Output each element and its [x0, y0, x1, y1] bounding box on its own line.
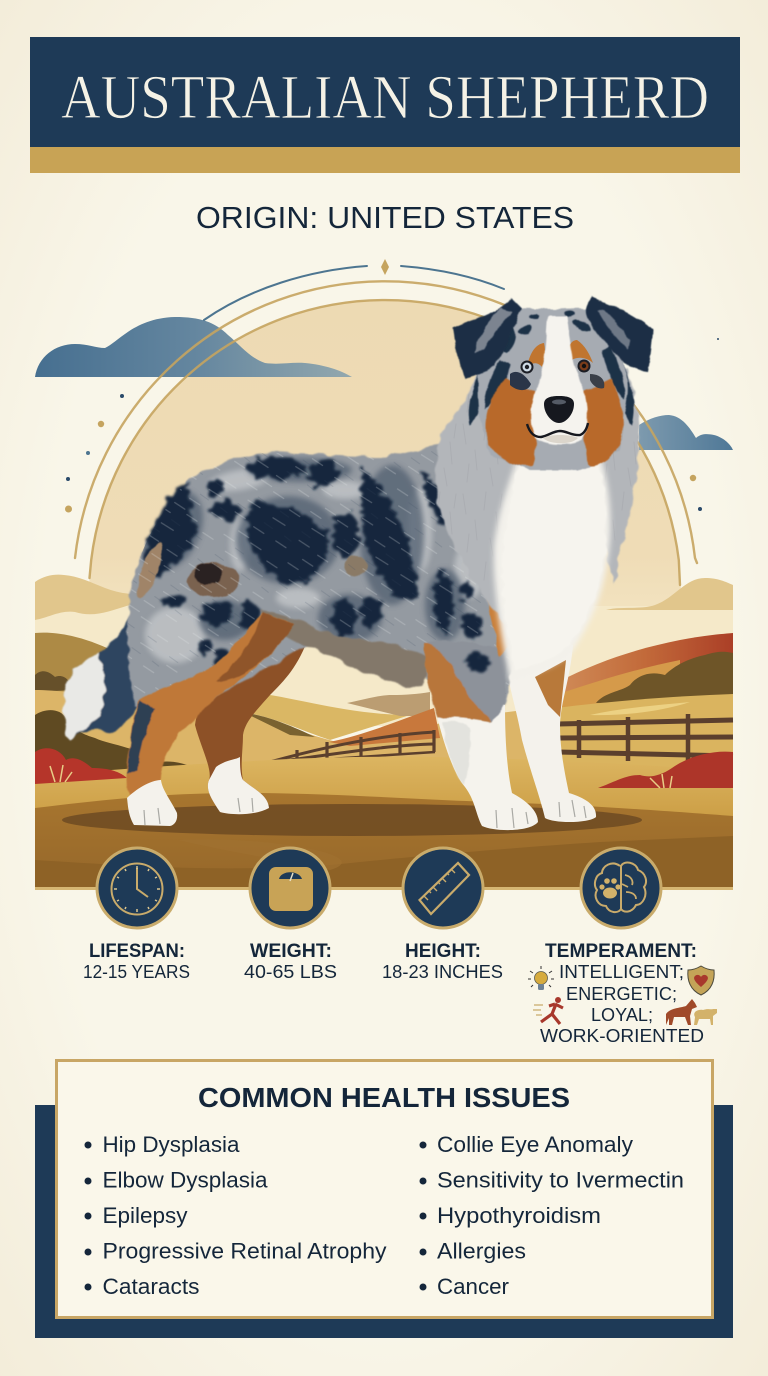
fur texture — [128, 445, 520, 705]
navy backing panel — [35, 1105, 733, 1338]
dark bush right — [596, 652, 733, 703]
health list right — [420, 1132, 684, 1299]
dark bush left — [35, 710, 197, 790]
belly fringe — [262, 610, 430, 687]
origin subtitle: ORIGIN: UNITED STATES — [196, 200, 574, 235]
red hills right — [556, 633, 733, 710]
sun disc — [89, 300, 681, 640]
sky band — [35, 606, 733, 726]
icon: runner — [533, 997, 563, 1024]
stat: lifespan — [83, 848, 190, 982]
ground — [35, 793, 733, 888]
landscape — [35, 575, 733, 890]
icon: dog — [666, 999, 697, 1025]
grass tufts — [50, 765, 672, 788]
foreground hill — [35, 757, 733, 830]
health list right: Sensitivity to Ivermectin — [437, 1168, 684, 1192]
right ear — [586, 297, 653, 372]
center hills — [240, 692, 410, 740]
red shrubs left — [35, 748, 127, 784]
icon: brain and paw — [581, 848, 661, 928]
dog — [64, 297, 653, 830]
mouth — [527, 423, 588, 437]
panel: common health issues — [56, 1060, 712, 1318]
health list right: Collie Eye Anomaly — [437, 1132, 633, 1157]
orange cheeks — [486, 378, 623, 466]
gold slope — [35, 690, 570, 790]
icon: scale — [250, 848, 330, 928]
temperament values: WORK-ORIENTED — [540, 1026, 704, 1046]
illustration scene — [35, 259, 733, 1338]
far hill right — [606, 578, 733, 610]
tail — [64, 610, 152, 740]
dark merle patches on skull — [484, 311, 625, 410]
orange shoulder stripe — [480, 568, 510, 657]
eye patches — [510, 372, 531, 390]
temperament values: INTELLIGENT; — [559, 962, 684, 982]
light fur patches — [145, 465, 486, 663]
merle spots — [147, 457, 482, 669]
health list right: Cancer — [437, 1274, 509, 1299]
dog shadow — [62, 804, 642, 836]
icon: shield with heart — [688, 966, 714, 995]
fence — [270, 714, 733, 765]
left eye — [520, 360, 534, 374]
health list left: Progressive Retinal Atrophy — [102, 1238, 386, 1264]
muzzle and blaze — [531, 316, 587, 445]
mid-tone mottling — [129, 458, 465, 642]
skull — [478, 308, 628, 470]
near front leg — [424, 641, 538, 830]
temperament label: TEMPERAMENT: — [545, 940, 697, 962]
panel base line — [35, 887, 733, 890]
health list right: Allergies — [437, 1238, 526, 1264]
health list right: Hypothyroidism — [437, 1203, 601, 1228]
health list left: Epilepsy — [102, 1203, 188, 1228]
icon: sheep — [694, 1009, 717, 1025]
neck ruff — [435, 370, 638, 625]
health list left — [84, 1132, 386, 1299]
stat: height — [382, 848, 503, 982]
height value: 18-23 INCHES — [382, 962, 503, 982]
stat: temperament — [528, 848, 717, 1046]
mid hill left — [35, 633, 135, 700]
nose — [544, 396, 574, 423]
weight value: 40-65 LBS — [244, 962, 337, 982]
scatter dots — [65, 338, 719, 512]
icon: lightbulb — [528, 966, 554, 990]
brown swirl — [132, 539, 368, 601]
near hind leg — [127, 612, 295, 826]
body — [128, 445, 520, 720]
health list left: Hip Dysplasia — [102, 1132, 240, 1157]
left ear — [453, 298, 522, 378]
icon: ruler — [403, 848, 483, 928]
decorative arcs — [75, 266, 697, 585]
lifespan value: 12-15 YEARS — [83, 962, 190, 982]
temperament values — [540, 962, 704, 1046]
gold hill right — [556, 694, 733, 790]
far front leg — [505, 640, 596, 822]
health list left: Cataracts — [102, 1274, 200, 1299]
diamond ornament — [381, 259, 389, 275]
cloud right — [639, 415, 733, 450]
temperament values: LOYAL; — [591, 1005, 653, 1025]
health heading: COMMON HEALTH ISSUES — [198, 1082, 570, 1113]
white chest — [494, 447, 610, 682]
far hind leg — [195, 630, 311, 814]
bushes left far — [35, 671, 72, 692]
weight label: WEIGHT: — [250, 940, 332, 962]
head — [453, 297, 653, 470]
height label: HEIGHT: — [405, 940, 481, 962]
header banner — [30, 37, 740, 173]
dark neck sides — [469, 360, 634, 425]
right eye — [578, 360, 590, 372]
icon: clock — [97, 848, 177, 928]
far hill left — [35, 575, 150, 620]
cloud left — [35, 317, 352, 377]
stat: weight — [244, 848, 337, 982]
lifespan label: LIFESPAN: — [89, 940, 185, 962]
tan brows — [527, 343, 545, 367]
red shrubs right — [598, 752, 733, 788]
health list left: Elbow Dysplasia — [102, 1168, 268, 1192]
temperament values: ENERGETIC; — [566, 984, 677, 1004]
